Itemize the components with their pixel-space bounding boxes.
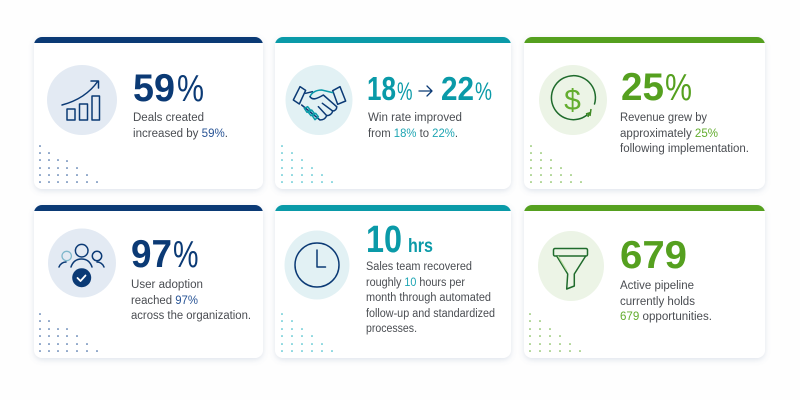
description: month through automated: [366, 292, 491, 304]
stat: 679: 679: [620, 234, 687, 277]
description: [368, 112, 462, 140]
description: reached 97%: [131, 295, 198, 307]
decorative dots: [530, 145, 582, 183]
description: 679 opportunities.: [620, 311, 712, 323]
card background: [275, 205, 511, 358]
description: currently holds: [620, 296, 695, 308]
top accent bar: [524, 205, 765, 211]
description: Sales team recovered: [366, 261, 472, 273]
top accent bar: [275, 37, 511, 43]
icon: funnel: [538, 231, 604, 301]
panel: revenue: [524, 37, 765, 189]
stat: 59%: [133, 67, 204, 110]
arrow: [419, 86, 432, 96]
description: [366, 261, 495, 335]
top accent bar: [34, 37, 263, 43]
panel: active pipeline: [524, 205, 765, 358]
stat: 25%: 25: [621, 66, 664, 109]
card background: [34, 37, 263, 189]
top accent bar: [34, 205, 263, 211]
stat: 10 hrs: 10: [366, 219, 402, 261]
description: Deals created: [133, 112, 204, 124]
card background: [524, 37, 765, 189]
decorative dots: [281, 145, 333, 183]
description: [131, 279, 251, 322]
icon: users with check: [48, 228, 116, 298]
stat: 59%: 59: [133, 67, 175, 110]
description: processes.: [366, 323, 417, 335]
description: across the organization.: [131, 310, 251, 322]
description: Win rate improved: [368, 112, 462, 124]
stat: 97%: [131, 233, 198, 276]
description: Revenue grew by: [620, 112, 707, 124]
stat: 18% to 22%: 22: [441, 70, 474, 107]
stat: 25%: [621, 66, 692, 109]
stat: 25%: %: [665, 67, 692, 109]
stat: 10 hrs: hrs: [408, 236, 433, 257]
icon: dollar cycle: [539, 65, 607, 135]
description: [620, 280, 712, 323]
description: following implementation.: [620, 143, 749, 155]
stat: 18% to 22%: %: [397, 78, 412, 106]
stat: 97%: 97: [131, 233, 172, 276]
stat: 18% to 22%: 18: [367, 70, 396, 107]
decorative dots: [281, 313, 333, 352]
icon: growth chart: [47, 65, 117, 135]
icon: handshake: [286, 65, 352, 135]
card background: [524, 205, 765, 358]
decorative dots: [39, 145, 98, 183]
top accent bar: [524, 37, 765, 43]
card background: [34, 205, 263, 358]
card background: [275, 37, 511, 189]
top accent bar: [275, 205, 511, 211]
decorative dots: [39, 313, 98, 352]
stat: 18% to 22%: [367, 70, 492, 107]
stat: 97%: %: [173, 234, 198, 276]
stat: 59%: %: [177, 68, 204, 110]
description: User adoption: [131, 279, 203, 291]
stat: 10 hrs: [366, 219, 433, 261]
description: follow-up and standardized: [366, 308, 495, 320]
icon: dollar cycle: $: [564, 84, 581, 117]
description: [133, 112, 228, 140]
description: Active pipeline: [620, 280, 694, 292]
decorative dots: [529, 313, 581, 352]
panel: hours recovered: [275, 205, 511, 358]
description: increased by 59%.: [133, 128, 228, 140]
description: [620, 112, 749, 155]
description: approximately 25%: [620, 128, 718, 140]
icon: clock: [284, 230, 350, 300]
panel: user adoption: [34, 205, 263, 358]
panel: deals created: [34, 37, 263, 189]
panel: win rate: [275, 37, 511, 189]
stat: 18% to 22%: %: [475, 78, 492, 106]
description: from 18% to 22%.: [368, 128, 458, 140]
description: roughly 10 hours per: [366, 277, 465, 289]
